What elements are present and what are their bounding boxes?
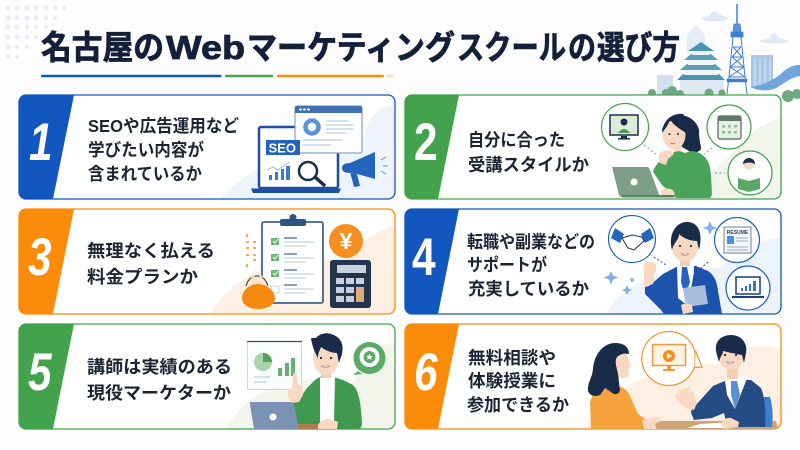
number 2: 2: [414, 114, 438, 172]
trees: [648, 86, 800, 102]
icon: SEO label: SEO: [268, 140, 296, 156]
background buildings: [657, 25, 773, 95]
text: card 2: [468, 130, 589, 175]
title: スクール: [457, 29, 566, 66]
chart board: [247, 342, 302, 390]
text: card 1: [88, 116, 239, 184]
icon: calendar circle: [707, 105, 751, 149]
icon: reader circle: [728, 151, 772, 195]
icon: SEO laptop: [251, 127, 341, 193]
text: card 5: 現役マーケターか: [87, 383, 232, 403]
icon: calculator: [330, 260, 371, 308]
title: Web: [166, 29, 245, 66]
icon: video circle: [602, 104, 648, 150]
icon: megaphone: [342, 152, 388, 187]
tower: [727, 4, 747, 94]
dot pattern: [5, 5, 66, 59]
skyline illustration: [648, 4, 800, 102]
number 1: 1: [29, 114, 53, 172]
title: [41, 29, 680, 66]
icon: handshake circle: [608, 216, 656, 262]
text: card 3: 料金プランか: [87, 267, 199, 287]
text: card 1: 学びたい内容が: [88, 140, 204, 160]
text: card 1: SEOや広告運用など: [88, 116, 239, 136]
panel: card 2: [405, 95, 781, 199]
figure: woman from behind: [588, 343, 662, 429]
number 6: 6: [414, 344, 438, 402]
icon: resume circle: [714, 218, 760, 262]
text: card 3: 無理なく払える: [87, 241, 215, 261]
title: の: [568, 29, 596, 66]
icon: yen coin: ¥: [340, 228, 353, 254]
icon: yen coin: [329, 224, 363, 258]
text: card 1: 含まれているか: [88, 164, 202, 184]
icon: analytics window: [295, 106, 362, 153]
title underline: [41, 75, 394, 77]
panel: card 5: [19, 324, 395, 431]
icon: chart laptop circle: [726, 266, 770, 310]
icon: coin purse: [242, 275, 275, 309]
text: card 2: 自分に合った: [468, 130, 565, 150]
figure: male consultant: [655, 335, 778, 430]
text: card 4: 転職や副業などの: [467, 232, 595, 252]
icon: resume circle: RESUME: [727, 230, 749, 236]
figure: businessman: [643, 222, 722, 314]
text: card 4: 充実しているか: [468, 279, 589, 299]
text: card 5: 講師は実績のある: [87, 357, 232, 377]
panel: card 3: [19, 209, 395, 314]
text: card 4: サポートが: [467, 255, 547, 275]
icon: magnifier: [299, 162, 325, 186]
dotted links: [644, 145, 725, 173]
sparkles: [604, 221, 717, 295]
text: card 3: [87, 241, 215, 287]
icon: award badge: [353, 342, 386, 375]
clouds: [702, 12, 788, 44]
title: マーケティング: [247, 29, 455, 66]
figure: woman with laptop: [612, 114, 712, 198]
text: card 6: 無料相談や: [468, 348, 556, 368]
title: 選び方: [597, 29, 680, 66]
number 3: 3: [28, 229, 52, 287]
figure: instructor: [250, 333, 362, 431]
icon: clipboard checklist: [262, 214, 323, 303]
speech bubble with video: [642, 332, 702, 386]
castle: [677, 42, 725, 94]
text: card 6: 体験授業に: [468, 371, 556, 391]
text: card 5: [87, 357, 232, 403]
text: card 2: 受講スタイルか: [468, 155, 589, 175]
text: card 4: [467, 232, 595, 299]
arena: [750, 65, 800, 90]
number 5: 5: [28, 344, 53, 402]
panel: card 1: [19, 95, 395, 199]
text: card 6: 参加できるか: [467, 395, 569, 415]
decorative dots: [247, 235, 255, 266]
number 4: 4: [412, 229, 436, 287]
title: 名古屋の: [41, 29, 164, 66]
text: card 6: [467, 348, 569, 415]
panel: card 6: [405, 324, 781, 430]
panel: card 4: [405, 209, 781, 314]
dotted links: [654, 257, 708, 269]
